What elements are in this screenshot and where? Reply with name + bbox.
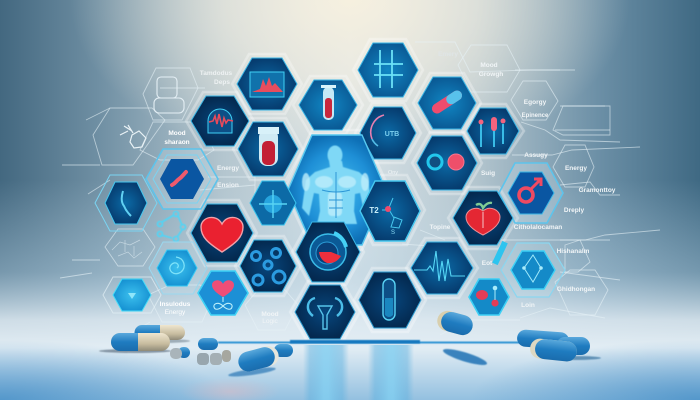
hexagon: light blue lower-left (103, 277, 161, 313)
hexagon: two circles (417, 136, 477, 190)
hexagon: big heart (191, 204, 253, 262)
hexagon: molecule with T2: T2 (369, 206, 379, 215)
heading text labels: Deps (214, 79, 230, 86)
hexagon: three pins (467, 108, 519, 154)
capsule: front left (99, 333, 171, 353)
heading text labels: Energy (217, 165, 239, 172)
heading text labels: Epinence (522, 113, 549, 119)
heading text labels: Energy (565, 165, 587, 172)
heading text labels: sharaon (164, 139, 190, 146)
heading text labels: Citholalocaman (514, 224, 562, 231)
hexagon: test tube top (299, 80, 357, 130)
hexagon: small lower-left (95, 175, 157, 231)
hexagon: wireframe map (112, 240, 142, 258)
capsule: floating (435, 309, 488, 368)
hexagon: central human figure (288, 135, 386, 245)
hexagon: apple heart (453, 191, 513, 245)
hexagon: gauge (360, 107, 416, 159)
hexagon: dark test tube (359, 272, 421, 328)
hexagon: squiggle with frame (146, 149, 218, 209)
hexagon: hash symbol (358, 43, 418, 97)
hexagon: gauge: UTB (385, 131, 399, 138)
icon: molecule outline (120, 125, 146, 148)
capsule: back left (134, 325, 190, 343)
heading text labels: Ony (388, 170, 398, 176)
hexagon: chart (237, 58, 297, 110)
hexagon: ECG (411, 242, 473, 294)
heading text labels: Ension (217, 182, 239, 189)
heading text labels: Logic (262, 318, 279, 325)
heading text labels: Ghidhongan (557, 286, 595, 293)
heading text labels: Mood (480, 62, 498, 69)
heading text labels: Gramonttoy (579, 187, 616, 194)
heading text labels: Dreply (564, 207, 584, 214)
capsules: right group (517, 329, 601, 362)
heading text labels: Insulodus (160, 301, 191, 308)
heading text labels: Suig (481, 170, 495, 177)
hexagon: red arrow with frame (499, 163, 563, 223)
hexagon: diamond network with frame (492, 241, 565, 297)
heading text labels: Tamdodus (200, 70, 233, 77)
heading text labels: Topine (430, 224, 451, 231)
hexagon: red dots (469, 279, 509, 315)
icon: network (158, 212, 186, 242)
hexagon: spiral (149, 242, 207, 294)
heading text labels: Assugy (524, 152, 548, 159)
hexagon: uterus (295, 285, 355, 339)
hexagon: test tube middle (238, 122, 298, 176)
hexagon: gears (240, 240, 296, 292)
hexagon: gear small (250, 181, 296, 225)
hexagon: capsule (418, 77, 476, 129)
heading text labels: Mood (261, 311, 279, 318)
hexagon: molecule with T2 (360, 181, 420, 241)
capsule: large blue (228, 344, 293, 378)
heading text labels: Hishanalm (557, 248, 590, 255)
hexagon: molecule with T2: S (391, 230, 395, 236)
floor line and reflections (180, 340, 520, 400)
heading text labels: Eot (482, 260, 493, 267)
icon: chair outline (154, 77, 184, 113)
heading text labels: Energy (165, 309, 186, 316)
small capsules and tablets (170, 338, 231, 365)
heading text labels: Mood (168, 130, 186, 137)
heading text labels (160, 51, 616, 325)
connector lines and empty outline hexagons (60, 42, 660, 340)
heading text labels: Emery (438, 51, 458, 58)
heading text labels: Egorgy (524, 99, 547, 106)
glass panels behind hexagons (186, 39, 524, 343)
hexagon: small heart (198, 271, 248, 315)
heading text labels: Loin (521, 302, 535, 309)
hexagon: radar (296, 222, 360, 282)
hexagon: waveform (191, 96, 249, 146)
heading text labels: Growgh (479, 71, 503, 78)
